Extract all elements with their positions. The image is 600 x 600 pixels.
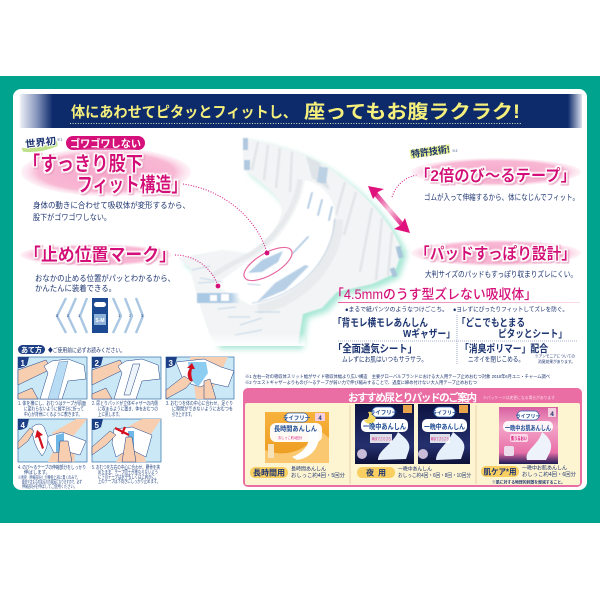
step 2: 2 — [94, 359, 100, 368]
callout: stretch tape: 「2倍のび〜るテープ」 — [415, 167, 576, 185]
usage label: long-time: 長時間用 — [253, 468, 285, 478]
step 4 caption: 4. のび〜るテープの伸縮部分をしっかり — [18, 463, 86, 471]
how-to heading: ◆ご使用前に必ずお読みください。 — [48, 346, 125, 354]
callout: waist mark: おなかの止める位置がパッとわかるから、 — [35, 273, 175, 283]
step 4 caption: 伸縮部分を伸ばしてご使用ください。 — [22, 483, 77, 490]
package note: ※パッケージは変更になる場合があります — [483, 395, 555, 400]
usage label: skin care: ※肌に対する物理的刺激を軽減すること。 — [492, 480, 565, 484]
usage label: long-time: おしっこ約4回・5回分 — [291, 471, 346, 479]
waist mark strip — [197, 293, 240, 303]
step 5 caption — [92, 463, 160, 485]
waist mark size icon: 2 — [129, 313, 132, 318]
step 4 caption: ※青骨（伸縮部分）が腰骨上部に貫くのみで、 — [18, 474, 80, 481]
step 4 caption: 伸ばします。 — [24, 468, 50, 476]
product: skin-care pad: ライフリー — [515, 414, 541, 420]
badge: world first: ※1 — [57, 137, 63, 142]
diaper illustration — [178, 138, 407, 349]
waist mark size icon — [56, 298, 144, 333]
step 3 — [166, 357, 234, 399]
step 5 — [92, 419, 161, 462]
thin absorbent core features: ピタッとシート」 — [498, 328, 567, 340]
product: long-time pad: 4 — [318, 416, 322, 422]
product: night pad 1: ライフリー — [370, 410, 397, 416]
green frame — [0, 76, 600, 523]
usage label: skin care — [481, 464, 577, 484]
callout: crotch fit: 股下がゴワゴワしない。 — [33, 212, 111, 222]
title banner — [19, 94, 582, 128]
thin absorbent core features: ムレずにお肌はいつもサラサラ。 — [342, 354, 427, 364]
thin absorbent core features: ●まるで紙パンツのようなつけごこち。 — [345, 306, 448, 314]
panel heading: おすすめ尿とりパッドのご案内 — [348, 391, 477, 404]
title banner: 体にあわせてピタッとフィットし、 — [71, 104, 297, 121]
thin absorbent core features: ニオイを閉じこめる。 — [468, 356, 524, 364]
badge: patented: 特許技術! — [410, 143, 451, 161]
callout: waist mark: 「止め位置マーク」 — [24, 245, 176, 265]
thin absorbent core features — [331, 286, 580, 365]
step 3: 3 — [168, 359, 174, 368]
product: skin-care pad — [499, 407, 558, 464]
thin absorbent core features: 「4.5mmのうす型ズレない吸収体」 — [331, 286, 537, 302]
thin absorbent core features: 消臭効果があります。 — [538, 359, 575, 364]
step 4 caption: 腹部や太ももの肌荒れの原因になりますので、必ず — [22, 478, 82, 486]
step 1: 1 — [20, 359, 26, 368]
step 5: 5 — [94, 421, 100, 430]
callout: stretch tape — [409, 143, 581, 202]
blue tabs — [243, 138, 248, 150]
thin absorbent core features: 「どこでもとまる — [457, 316, 525, 329]
product: night pad 1: 一晩中あんしん — [363, 421, 406, 431]
callout: crotch fit: 「すっきり股下 — [23, 153, 143, 176]
callout: waist mark — [20, 244, 176, 293]
waist mark size icon: S-M — [95, 318, 105, 324]
thin absorbent core features: 「背モレ横モレあんしん — [333, 316, 428, 329]
title banner: 座ってもお腹ラクラク! — [304, 101, 520, 123]
waist mark size icon: 2 — [67, 313, 70, 318]
step 1 caption — [18, 399, 86, 418]
usage label: skin care: 一晩中お肌あんしん — [522, 464, 567, 472]
step 1 caption: に変わらないように縦半分に折って — [24, 404, 84, 412]
waist mark size icon: 1 — [118, 313, 121, 318]
step 3 caption: 引き上げます。 — [172, 410, 194, 418]
step 4: 4 — [20, 421, 26, 430]
step 2 — [92, 357, 161, 399]
pill: ゴワゴワしない — [70, 137, 141, 150]
product: long-time pad: 長時間あんしん — [274, 424, 317, 433]
callout: crotch fit — [21, 134, 191, 222]
callout: pad fit — [411, 240, 581, 279]
product: night pad 1: 朝までさらさら — [372, 436, 391, 441]
waist mark size icon: 3 — [141, 313, 144, 318]
step 2 caption: に収まるように置き、体をおむつの — [98, 404, 158, 412]
callout: stretch tape: ※2 — [452, 149, 458, 153]
pink highlight ellipse on diaper — [239, 241, 297, 287]
usage label: skin care: おしっこ約4回・6回分 — [522, 470, 577, 478]
blue patches — [248, 251, 283, 273]
step 2 caption — [92, 399, 158, 418]
product: night pad 1 — [355, 404, 414, 464]
thin absorbent core features: ●ヨレずにぴったりフィットしてズレを防ぐ。 — [453, 306, 568, 314]
step 4 caption — [18, 463, 86, 490]
footnotes — [245, 373, 550, 386]
how-to heading: あて方 — [21, 344, 42, 354]
step 5 caption: 上のテープは下向きにしっかり止めます。 — [98, 477, 160, 485]
product: long-time pad: おしっこ約4回分 — [278, 435, 302, 440]
usage label: night — [357, 464, 472, 479]
product: skin-care pad: 肌うるおい — [511, 435, 527, 442]
callout: waist mark: かんたんに装着できる。 — [35, 283, 116, 293]
product: night pad 2: 一晩中あんしん — [424, 422, 465, 431]
product: skin-care pad: 一晩中お肌あんしん — [505, 423, 551, 432]
callout: crotch fit: 身体の動きに合わせて吸収体が変形するから、 — [33, 200, 190, 210]
waist mark size icon: 1 — [78, 313, 81, 318]
badge: world first: 世界初 — [25, 135, 57, 150]
usage label: night: おしっこ約4回・6回・8回・10回分 — [398, 471, 472, 479]
step 5 caption: めたまま、テープ同士が重ならないよう — [98, 468, 158, 476]
step 1 caption: 中心が背骨にくるように敷きます。 — [24, 410, 82, 418]
panel: recommended pads — [243, 388, 582, 487]
how-to heading — [18, 344, 125, 354]
absorbent core — [215, 180, 335, 305]
thin absorbent core features: 「消臭ポリマー」配合 — [460, 342, 548, 355]
step 3 caption: に隙間ができないようにおむつを — [172, 404, 233, 412]
usage label: night: 一晩中あんしん — [398, 464, 432, 472]
double arrow stretch — [368, 186, 410, 233]
dotted leader: tape — [392, 175, 417, 197]
step 3 caption: 3. おむつを体の中心に合わせ、足ぐり — [166, 399, 233, 407]
product: night pad 2: 朝までさらさら — [431, 436, 449, 441]
footnotes: ※2 ウエストギャザーよりものび〜るテープが弱い力で伸び縮みすることで、過度に締め付けない大人用テープ止めおむつ — [245, 379, 477, 386]
dotted leader: waist mark — [175, 255, 220, 288]
step 5 caption: 5. おむつを左右の中心に合わせ、腰骨を挟 — [92, 463, 160, 471]
usage label: skin care: 肌ケア*用 — [484, 468, 516, 476]
usage label: long-time: 長時間あんしん — [291, 466, 326, 472]
step 3 caption — [166, 399, 233, 418]
step 5 caption: に下のテープは水平もしくは上向きに、 — [98, 472, 158, 480]
step 2 caption: 2. 尿とりパッドが立体ギャザーの内側 — [92, 399, 158, 407]
product: skin-care pad: 4 — [550, 411, 554, 418]
thin absorbent core features: 「全面通気シート」 — [333, 342, 417, 355]
step 1 — [18, 357, 87, 399]
badge: world first — [21, 134, 63, 153]
thin absorbent core features: ※アンモニアについての — [535, 354, 575, 358]
step 4 — [18, 419, 87, 462]
product: night pad 2: ライフリー — [432, 410, 457, 416]
thin absorbent core features: Wギャザー」 — [403, 328, 455, 340]
callout: pad fit: 「パッドすっぽり設計」 — [415, 245, 576, 263]
usage label: night: 夜用 — [366, 468, 386, 478]
step 2 caption: 上に戻します。 — [98, 410, 122, 418]
waist mark size icon: 3 — [56, 313, 59, 318]
product: long-time pad — [265, 412, 329, 463]
usage label: long-time — [250, 466, 346, 479]
footnotes: ※1 左右一対の吸収体スリット幅がサイド吸収体幅より広い構造 主要グローバルブランドにおける大人用テープ止めおむつ対象 2018年6月ユニ・チャーム調べ — [245, 373, 550, 380]
callout: crotch fit: フィット構造」 — [77, 174, 187, 197]
white content panel — [13, 89, 587, 490]
product: long-time pad: ライフリー — [283, 415, 310, 422]
step 1 caption: 1. 体を横にし、おむつはテープが肌面 — [18, 399, 86, 407]
dotted leader: crotch fit — [183, 184, 269, 255]
product: night pad 2 — [418, 404, 470, 464]
